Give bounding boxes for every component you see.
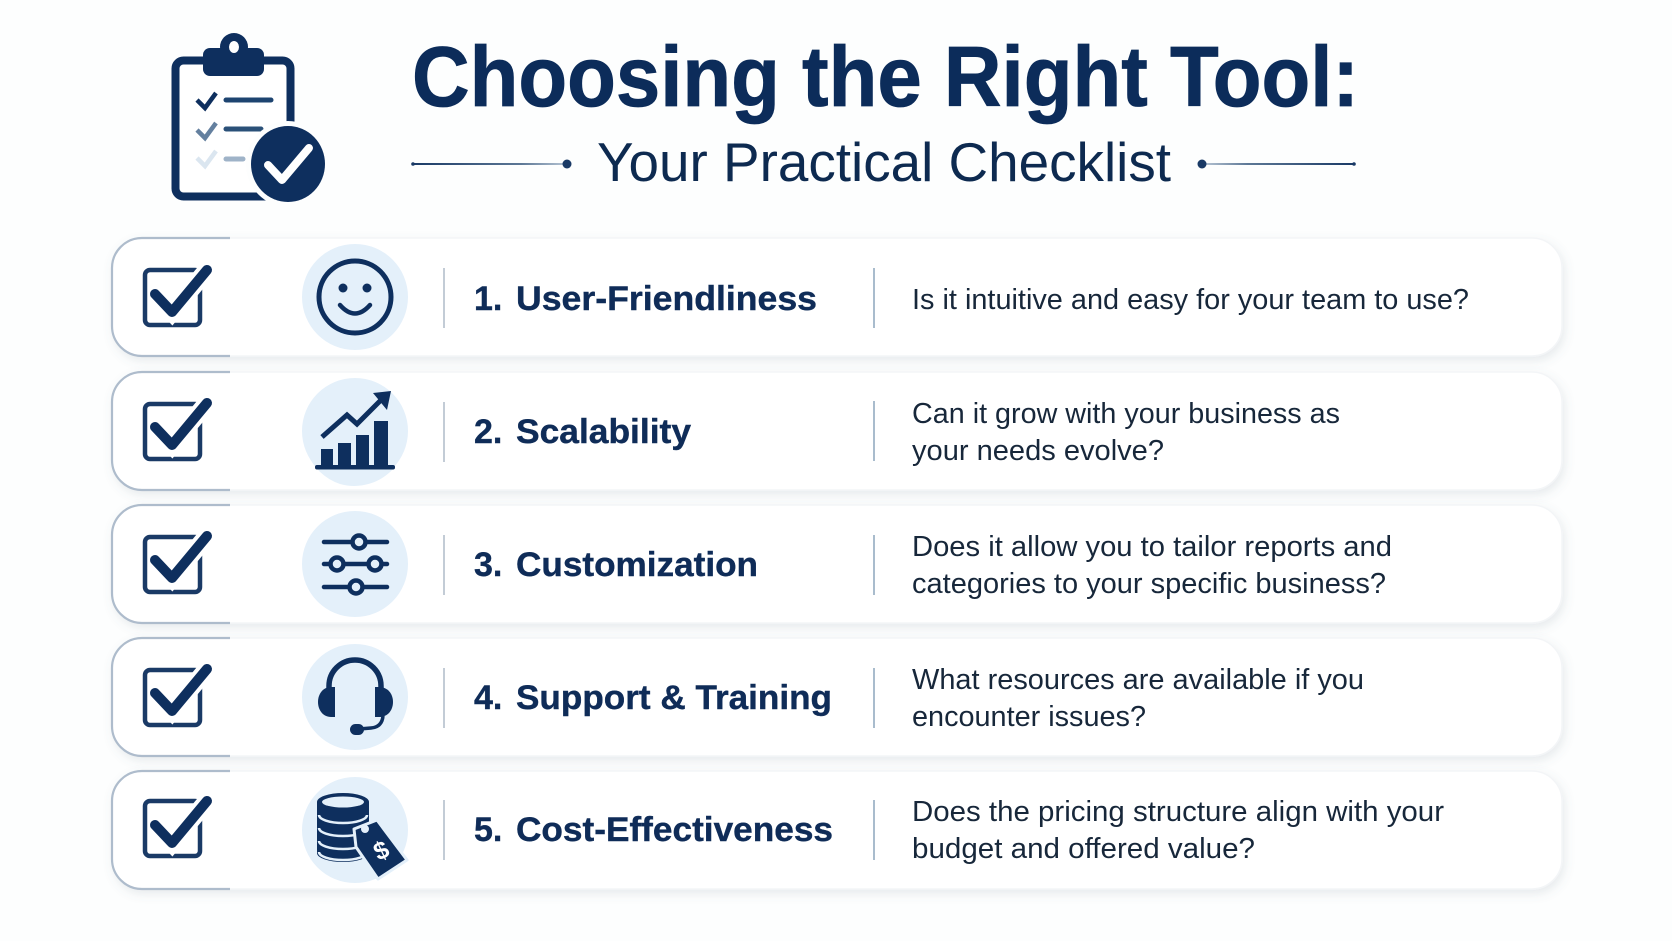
icon: checkbox bbox=[145, 801, 207, 856]
heading: scalability: 2. bbox=[474, 413, 502, 451]
text: scalability question: Can it grow with your business as bbox=[912, 398, 1340, 430]
icon: checkbox bbox=[145, 536, 207, 592]
heading: cost-effectiveness: 5. bbox=[474, 811, 502, 849]
heading: cost-effectiveness: Cost-Effectiveness bbox=[516, 811, 833, 849]
text: scalability question: your needs evolve? bbox=[912, 435, 1164, 467]
icon: checkbox bbox=[145, 669, 207, 725]
icon: checkbox bbox=[145, 270, 207, 325]
text: cost question bbox=[912, 796, 1444, 865]
icon: coin stack with price tag bbox=[302, 777, 408, 883]
heading: user-friendliness: 1. bbox=[474, 280, 502, 318]
heading: support and training: 4. bbox=[474, 679, 502, 717]
text: user-friendliness question: Is it intuitive and easy for your team to use? bbox=[912, 284, 1469, 316]
text: support question: What resources are available if you bbox=[912, 664, 1364, 696]
heading: scalability: Scalability bbox=[516, 413, 691, 451]
icon: checkbox bbox=[145, 403, 207, 459]
subtitle rule: right bbox=[1198, 160, 1356, 168]
text: support question: encounter issues? bbox=[912, 701, 1146, 733]
text: customization question bbox=[912, 531, 1392, 600]
heading: support and training: Support & Training bbox=[516, 679, 832, 717]
text: customization question: categories to your specific business? bbox=[912, 568, 1386, 600]
icon: clipboard with check badge bbox=[176, 33, 330, 207]
title: Choosing the Right Tool: bbox=[412, 30, 1359, 125]
icon: coin stack with price tag: $ bbox=[369, 835, 394, 867]
text: cost question: Does the pricing structure align with your bbox=[912, 796, 1444, 828]
panel: row 4 support and training bbox=[112, 638, 1562, 756]
icon: smiley face bbox=[302, 244, 408, 350]
subtitle: Your Practical Checklist bbox=[597, 131, 1171, 193]
text: support question bbox=[912, 664, 1364, 733]
heading: customization: Customization bbox=[516, 546, 758, 584]
icon: sliders bbox=[302, 511, 408, 617]
subtitle rule: left bbox=[411, 160, 572, 168]
panel: row 3 customization bbox=[112, 505, 1562, 623]
icon: growth chart bbox=[302, 378, 408, 486]
panel: row 1 user-friendliness bbox=[112, 238, 1562, 356]
panel: row 5 cost-effectiveness bbox=[112, 771, 1562, 889]
icon: headset bbox=[302, 644, 408, 750]
text: cost question: budget and offered value? bbox=[912, 833, 1255, 865]
heading: user-friendliness: User-Friendliness bbox=[516, 280, 817, 318]
heading: customization: 3. bbox=[474, 546, 502, 584]
text: customization question: Does it allow you to tailor reports and bbox=[912, 531, 1392, 563]
text: scalability question bbox=[912, 398, 1340, 467]
panel: row 2 scalability bbox=[112, 372, 1562, 490]
